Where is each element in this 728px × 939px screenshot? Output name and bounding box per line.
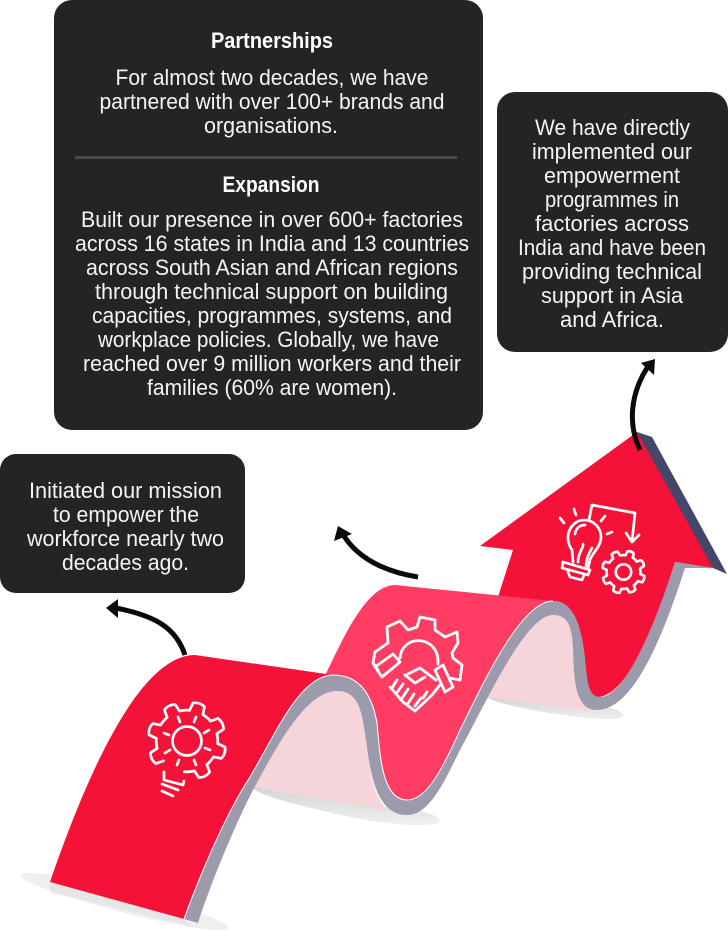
text block: expansion: across 16 states in India and 13 countries: [75, 231, 469, 256]
text block: expansion: capacities, programmes, systems, and: [92, 303, 452, 328]
panel: direct implementation: implemented our: [532, 139, 692, 164]
icon: lightbulb gear: [144, 698, 230, 796]
panel: direct implementation: support in Asia: [541, 283, 684, 308]
panel: partnerships and expansion: [54, 0, 483, 430]
panel: direct implementation: programmes in: [545, 187, 679, 212]
panel: mission start: Initiated our mission: [29, 478, 222, 503]
text block: expansion: through technical support on building: [95, 279, 448, 304]
text block: expansion: Built our presence in over 600+ factories: [81, 207, 463, 232]
heading: expansion: Expansion: [222, 172, 320, 197]
text block: partnerships: organisations.: [204, 113, 338, 138]
panel: mission start: decades ago.: [62, 550, 189, 575]
text block: partnerships: [100, 65, 444, 138]
icon: handshake gear: [373, 617, 462, 711]
panel: direct implementation: We have directly: [535, 115, 690, 140]
panel: mission start: workforce nearly two: [26, 526, 224, 551]
panel: direct implementation: and Africa.: [560, 307, 664, 332]
text block: expansion: across South Asian and African regions: [86, 255, 458, 280]
arrow: to mission start: [106, 599, 185, 655]
text block: partnerships: For almost two decades, we have: [116, 65, 428, 90]
panel: direct implementation: [497, 92, 728, 352]
heading: partnerships: Partnerships: [211, 28, 333, 53]
text block: expansion: families (60% are women).: [147, 375, 397, 400]
icon: lightbulb and gear cycle: [560, 505, 647, 595]
panel: direct implementation: providing technical: [522, 259, 702, 284]
panel: mission start: [0, 454, 245, 593]
panel: direct implementation: India and have been: [518, 235, 706, 260]
panel: direct implementation: factories across: [535, 211, 689, 236]
text block: expansion: [75, 207, 469, 400]
panel: direct implementation: empowerment: [544, 163, 680, 188]
arrow: to direct implementation: [632, 359, 655, 450]
text block: partnerships: partnered with over 100+ brands and: [100, 89, 444, 114]
arrow: to partnerships and expansion: [334, 526, 418, 577]
text block: expansion: workplace policies. Globally, we have: [97, 327, 439, 352]
chart: rising ribbon arrow: [18, 432, 727, 939]
panel: mission start: to empower the: [53, 502, 199, 527]
text block: expansion: reached over 9 million workers and their: [83, 351, 461, 376]
